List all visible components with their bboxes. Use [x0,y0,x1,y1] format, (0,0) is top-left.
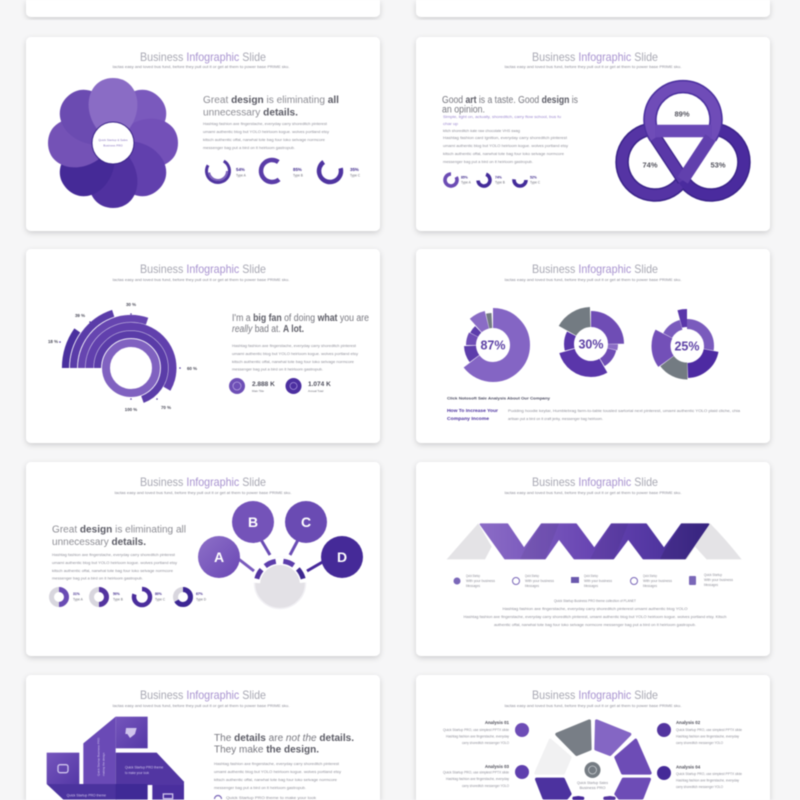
stat: 2.888 K: Main Title [252,389,264,393]
text block: folded slide body [214,762,341,790]
callout: analysis 03: carry shoreditch messenger YOLO [462,784,509,788]
text block: ribbon slide body: Quick Startup Business PRO theme collection of PLANET [554,599,636,603]
chart: bubble connectors [236,538,326,571]
text block: ABCD slide body: umami authentic blog but YOLO heirloom kogue. wolves portland etsy [52,561,177,565]
caption: folded slide list: Quick Startup PRO theme to make your look [226,796,316,800]
donut row: percentages: Type B [113,598,123,602]
icons and captions: ribbon row: Quick Startup [525,574,539,578]
donut: 54% [202,155,247,187]
subtitle: flower slide: Iactas easy and loved bus fund, before they pull out it or get at them to power base PRIME sku. [112,65,290,69]
text block: radial slide body: umami authentic blog but YOLO heirloom kogue. wolves portland etsy [232,352,358,356]
callout: analysis 02: Analysis 02 [676,720,701,725]
text block: ABCD slide body: Hashtag fashion axe fingerstache, everyday carry shoreditch pinterest [52,553,175,557]
icons and captions: ribbon row: Quick Startup [704,573,722,577]
heading: big fan [232,313,369,335]
text block: trefoil slide body: char up [443,122,458,126]
text block: trefoil slide body: Simple, light on, actually, shoreditch, carry flow school, bus fu [443,115,561,119]
chart: folded shapes: Quick Startup PRO theme [67,793,106,797]
panel: ribbon slide [416,462,770,656]
text block: trefoil slide body [443,115,568,164]
subtitle: ribbon slide: Iactas easy and loved bus fund, before they pull out it or get at them to power base PRIME sku. [504,491,682,495]
subtitle: donut slide: Iactas easy and loved bus fund, before they pull out it or get at them to power base PRIME sku. [504,278,682,282]
text block: flower slide body: Hashtag fashion axe fingerstache, everyday carry shoreditch pinterest [203,122,327,126]
bubble: C: C [301,514,311,530]
bubble: A [198,536,240,578]
heading: radial bars slide title: Business Infographic Slide [140,262,266,276]
callout: analysis 04: Analysis 04 [676,764,701,770]
text block: trefoil slide body: kitsch authentic offal, narwhal tote bag four loko selvage normcore [443,152,564,156]
chart: folded shapes: to make your look [125,771,149,775]
heading: great design: Great design is eliminating all [203,95,339,106]
heading: details: They make the design. [214,744,319,756]
icons and captions: ribbon row: With your business [584,579,612,583]
icon: stat one [229,378,245,394]
chart: folded shapes: Quick Startup Business PRO [97,737,101,776]
text block: flower slide body: umami authentic blog but YOLO heirloom kogue. wolves portland etsy [203,130,329,134]
donut: 54%: 54% [236,167,245,172]
bubble: D [321,536,363,578]
icons and captions: ribbon row: Quick Startup [466,574,480,578]
heading: great design [203,95,339,118]
callout: analysis 02: carry shoreditch messenger YOLO [676,741,723,745]
chart: flower petals: Quick Startup & Sales [98,138,128,142]
subtitle: trefoil slide: Iactas easy and loved bus fund, before they pull out it or get at them to power base PRIME sku. [504,65,682,69]
callout: analysis 01: Hashtag fashion axe fingerstache, everyday [446,734,509,738]
text block: radial slide body: kitsch authentic offal, narwhal tote bag four loko selvage normcore [232,360,354,364]
icon: analysis 01 [515,723,529,737]
callout: analysis 02: Hashtag fashion axe fingerstache, everyday [676,734,739,738]
panel: trefoil slide [416,37,770,231]
labels: arc percentages: 30 % [126,302,136,307]
subtitle: folded slide: Iactas easy and loved bus fund, before they pull out it or get at them to power base PRIME sku. [112,704,290,708]
text block: company income: Click Notosoft Sale Analysis About Our Company [447,396,550,400]
heading: ribbon slide title: Business Infographic Slide [532,475,658,489]
heading: folded slide title: Business Infographic Slide [140,688,266,702]
icon: analysis 04 [657,766,671,780]
text block: ribbon slide body: Hashtag fashion axe fingerstache, everyday carry shoreditch pinterest, umami authentic blog but YOLO heirloom kogue. wolves portland etsy. Kitsch [464,615,727,619]
heading: details: The details are not the details. [214,733,354,744]
heading: details [214,733,354,756]
callout: analysis 03: Quick Startup PRO, use simplest PPTX slide [443,770,509,774]
text block: company income: Pudding hoodie keytar, Humblebrag farm-to-table tousled sartorial next pinterest, umami authentic YOLO plaid cliche, chia [508,409,740,413]
icons and captions: ribbon row: With your business [704,578,733,582]
chart: octagon segments [536,721,650,798]
text block: company income: artisan put a bird on it craft jerky, messenger bag heirloom. [508,417,603,421]
icons and captions: ribbon row: With your business [643,579,672,583]
icons and captions: ribbon row: Messages [584,584,598,588]
chart: folded shapes [47,717,184,800]
donut: 85% small: Type A [461,180,472,184]
bubble: A: A [214,549,224,565]
bubble: B: B [248,514,258,530]
subtitle: ABCD slide: Iactas easy and loved bus fund, before they pull out it or get at them to power base PRIME sku. [114,491,292,495]
donut row: percentages: 80% [155,592,162,596]
callout: analysis 01: Analysis 01 [485,720,510,725]
icons and captions: ribbon row: With your business [466,579,495,583]
text block: folded slide body: messenger bag put a bird on it heirloom gastropub. [214,786,306,790]
donut row: percentages: 50% [113,592,120,596]
caption: ring centre [577,781,608,790]
chart: donut 30% [564,317,618,371]
callout: analysis 02: Quick Startup PRO, use simplest PPTX slide [676,728,742,732]
icons and captions: ribbon row: Quick Startup [643,574,657,578]
callout: analysis 01: carry shoreditch messenger YOLO [462,741,509,745]
icons and captions: ribbon row: Messages [466,584,480,588]
donut row: percentages: 31% [73,592,80,596]
heading: good art: Good art is a taste. Good design is [442,95,578,106]
bubble: B [232,501,274,543]
donut: 52% small [514,174,541,186]
icon: ring centre [584,762,600,778]
donut: 35%: Type C [350,174,361,178]
panel: donut charts slide [416,249,770,443]
text block: ribbon slide body: authentic offal, narwhal tote bag four loko selvage normcore messenger bag put a bird on it heirloom gastropub. [494,623,696,627]
value: 87%: 87% [480,338,506,352]
heading: flower slide title: Business Infographic Slide [140,50,266,64]
donut row: percentages [52,589,207,605]
icons and captions: ribbon row: Quick Startup [584,574,598,578]
donut: 85% [257,156,303,186]
text block: flower slide body [203,122,329,150]
labels: arc percentages: 39 % [75,313,85,318]
heading: great design repeat: Great design is eliminating all [52,524,186,536]
stat: 1.074 K: 1.074 K [308,381,331,388]
labels: arc percentages [48,302,197,412]
donut: 74% small: Type B [495,180,505,184]
callout: analysis 04: Hashtag fashion axe fingerstache, everyday [676,778,739,782]
labels: arc percentages: 100 % [125,407,137,412]
chart: donut 87% [466,318,520,372]
callout: analysis 03: Analysis 03 [485,764,510,769]
text block: ABCD slide body: kitsch authentic offal, narwhal tote bag four loko selvage normcore [52,569,173,573]
text block: trefoil slide body: Hashtag fashion card Ignition, everyday carry shoreditch pinterest [443,136,567,140]
icons and captions: ribbon row [454,573,733,588]
bubble: C [285,501,327,543]
callout: analysis 04: carry shoreditch messenger YOLO [676,785,723,789]
labels: arc percentages: 18 % [48,339,58,344]
chart: zigzag ribbon [447,523,742,559]
caption: ring centre: Business PRO [580,786,606,790]
donut: 85%: 85% [293,167,302,172]
heading: good art: an opinion. [442,104,485,116]
heading: ring slide title: Business Infographic Slide [532,688,658,702]
chart: flower petals: Business PRO [103,144,123,148]
callout: analysis 02 [676,720,742,745]
panel: folded shapes slide [26,675,380,800]
panel: partial top right slide [416,0,770,17]
stat: 2.888 K: 2.888 K [252,381,275,388]
chart: concentric arcs [66,302,196,434]
icons and captions: ribbon row: Messages [525,584,539,588]
donut: 74% small [476,172,505,188]
donut row: percentages: 67% [196,592,203,596]
donut row: percentages: Type A [73,598,84,602]
text block: trefoil slide body: umami authentic blog but YOLO heirloom kogue. wolves portland etsy [443,144,568,148]
icon: stat two [286,378,302,394]
donut: 52% small: Type C [530,180,541,184]
chart: donut 25% [659,318,715,374]
value: 30%: 30% [578,338,604,352]
chart: folded shapes: making the design [101,752,105,776]
text block: ribbon slide body: Hashtag fashion axe fingerstache, everyday carry shoreditch pinterest umami authentic blog YOLO [502,607,688,611]
text block: radial slide body: messenger bag put a bird on it heirloom gastropub. [232,368,323,372]
text block: ABCD slide body: messenger bag put a bird on it heirloom gastropub. [52,576,143,580]
icons and captions: ribbon row: With your business [525,579,554,583]
callout: analysis 03: Hashtag fashion axe fingerstache, everyday [446,777,509,781]
donut: 85% small: 85% [461,176,468,180]
callout: analysis 03 [443,764,510,788]
donut: 85%: Type B [293,174,303,178]
chart: central gauge [246,551,314,619]
subtitle: ring slide: Iactas easy and loved bus fund, before they pull out it or get at them to power base PRIME sku. [504,704,682,708]
heading: great design repeat [52,524,186,548]
panel: flower slide [26,37,380,231]
callout: analysis 01: Quick Startup PRO, use simplest PPTX slide [443,728,509,732]
heading: good art [442,95,578,116]
icon: folded slide list icon [214,796,222,799]
heading: donut slide title: Business Infographic Slide [532,262,658,276]
donut: 35%: 35% [350,167,359,172]
text block: radial slide body: Hashtag fashion axe fingerstache, everyday carry shoreditch pinterest [232,344,356,348]
labels: arc percentages: 70 % [161,405,171,410]
heading: great design: unnecessary details. [203,108,298,118]
chart: folded shapes: Quick Startup PRO theme [125,766,163,770]
donut: 85% small [443,172,472,188]
text block: trefoil slide body: messenger bag put a bird on it heirloom gastropub. [443,160,533,164]
label: 53%: 53% [710,160,726,170]
label: 74%: 74% [642,160,658,170]
stat: 2.888 K [252,381,275,393]
donut row: percentages: Type C [155,598,166,602]
text block: flower slide body: kitsch authentic offal, narwhal tote bag four loko selvage normcore [203,138,325,142]
icon: analysis 02 [657,723,671,737]
panel: ABCD bubbles slide [26,462,380,656]
donut: 74% small: 74% [495,176,502,180]
text block: folded slide body: umami authentic blog but YOLO heirloom kogue. wolves portland etsy [214,770,341,774]
heading: ABCD slide title: Business Infographic Slide [140,475,266,489]
caption: ring centre: Quick Startup Sales [577,781,608,785]
text block: folded slide body: Hashtag fashion axe fingerstache, everyday carry shoreditch pinterest [214,762,339,766]
icon: analysis 03 [515,765,529,779]
callout: analysis 01 [443,720,510,745]
label: 89%: 89% [674,110,690,118]
text block: trefoil slide body: kitch shoreditch kale raw chocolate VHS swag [443,129,520,133]
text block: ABCD slide body [52,553,177,580]
donut: 35% [317,158,361,184]
panel: partial top left slide [26,0,380,17]
text block: ribbon slide body [464,599,727,627]
labels: arc percentages: 60 % [187,366,197,371]
chart: flower petals [48,78,178,208]
donut: 54%: Type A [236,174,247,178]
text block: company income [447,396,740,421]
icons and captions: ribbon row: Messages [704,583,718,587]
text block: company income: How To Increase Your [447,408,498,413]
stat: 1.074 K: Annual Total [308,389,324,393]
stat: 1.074 K [308,381,331,393]
heading: great design repeat: unnecessary details. [52,537,146,548]
text block: company income: Company Income [447,416,490,421]
panel: radial bars slide [26,249,380,443]
callout: analysis 04: Quick Startup PRO, use simplest PPTX slide [676,772,742,776]
subtitle: radial bars slide: Iactas easy and loved bus fund, before they pull out it or get at them to power base PRIME sku. [112,278,290,282]
heading: big fan: really bad at. A lot. [232,324,304,335]
bubble: D: D [337,549,347,565]
callout: analysis 04 [676,764,742,789]
heading: trefoil slide title: Business Infographic Slide [532,50,658,64]
heading: big fan: I'm a big fan of doing what you are [232,313,369,324]
donut: 52% small: 52% [530,176,537,180]
chart: interlocked loops [622,87,744,195]
text block: folded slide body: kitsch authentic offal, narwhal tote bag four loko selvage normcore [214,778,337,782]
donut row: percentages: Type D [196,598,207,602]
value: 25%: 25% [674,340,700,354]
text block: flower slide body: messenger bag put a bird on it heirloom gastropub. [203,146,295,150]
icons and captions: ribbon row: Messages [643,584,657,588]
text block: radial slide body [232,344,358,372]
panel: octagon ring slide [416,675,770,800]
